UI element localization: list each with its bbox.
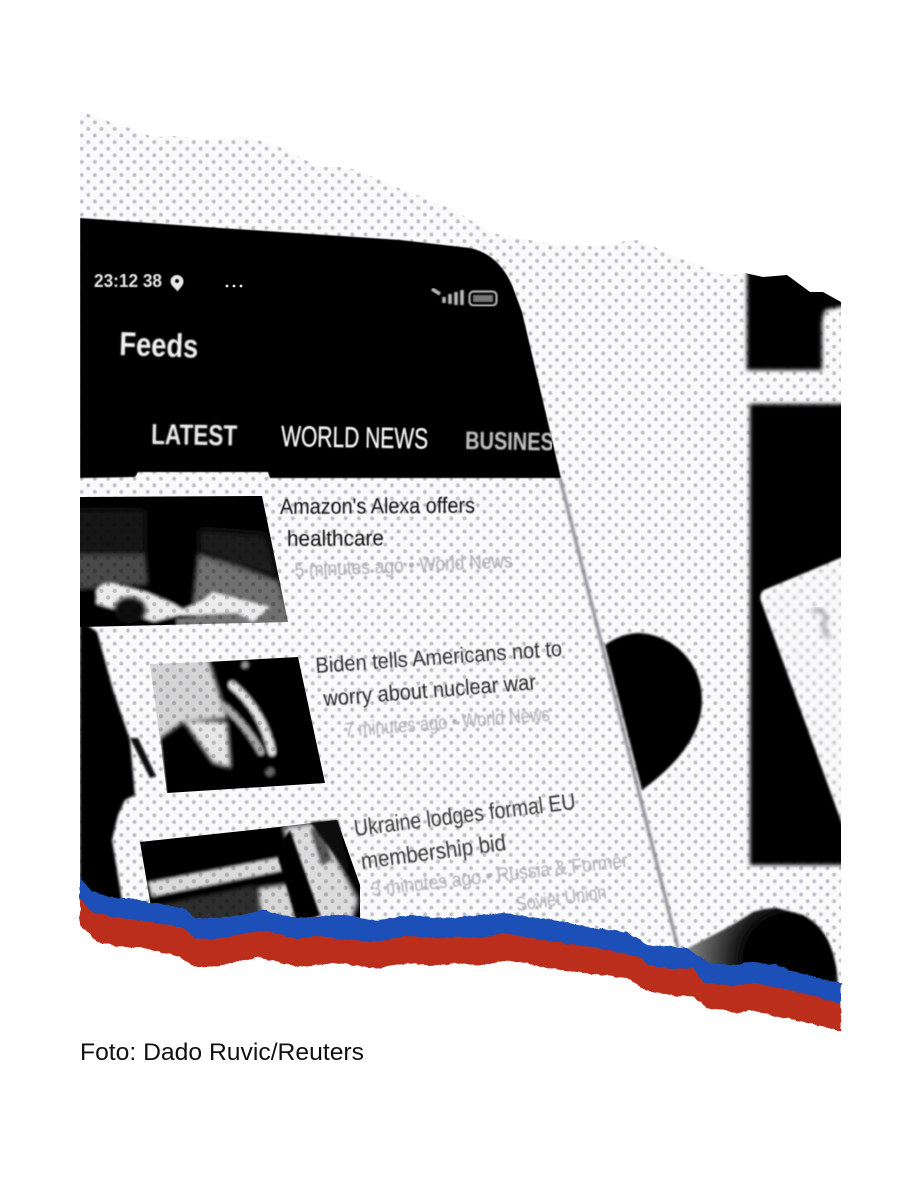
caption: Foto: Dado Ruvic/Reuters — [80, 1039, 364, 1066]
headline 2: Biden tells Americans not to — [315, 636, 563, 678]
icon: location pin — [170, 275, 184, 292]
white card in panel — [760, 556, 845, 832]
icon: signal and battery — [432, 289, 496, 306]
meta 3 — [371, 856, 628, 912]
headline 1: healthcare — [287, 525, 384, 551]
torn blue band — [80, 878, 841, 1004]
panel: torn halftone photo — [70, 100, 850, 1040]
thumbnail 1 — [80, 496, 288, 627]
black bump bottom right — [688, 908, 838, 990]
meta 3: 3 minutes ago • Russia & Former — [370, 850, 629, 901]
black panel right — [750, 404, 850, 865]
status dots — [226, 285, 242, 287]
halftone paper — [80, 100, 841, 1040]
thumbnail 3 — [140, 820, 360, 918]
meta 3: Soviet Union — [515, 882, 608, 916]
headline 2: worry about nuclear war — [322, 669, 537, 711]
tab: LATEST: LATEST — [151, 419, 238, 453]
headline 3 — [354, 792, 575, 870]
phone black header — [80, 218, 561, 478]
thumbnail 2 — [150, 657, 325, 793]
headline 2 — [316, 642, 562, 708]
thumbnail 2 side wedge — [130, 738, 156, 778]
black half circle — [605, 633, 702, 790]
phone status time: 23:12 38 — [94, 271, 162, 291]
phone edge shadow — [560, 478, 678, 948]
headline 1: Amazon's Alexa offers — [280, 493, 475, 519]
headline 1 — [280, 496, 476, 547]
smudge on card — [812, 610, 830, 638]
thumbnail 3 right wedge — [310, 820, 350, 875]
heading: Feeds: Feeds — [119, 325, 199, 365]
meta 2: 7 minutes ago • World News — [344, 704, 551, 742]
left dark column — [80, 620, 135, 900]
torn red band — [80, 896, 841, 1031]
tab: BUSINESS: BUSINESS — [465, 427, 567, 457]
headline 3: Ukraine lodges formal EU — [352, 788, 577, 841]
illustration with caption — [79, 111, 842, 1060]
black block top right — [747, 265, 845, 370]
thumbnail 3 centre stripe — [276, 830, 320, 925]
tab: WORLD NEWS: WORLD NEWS — [281, 421, 428, 456]
headline 3: membership bid — [359, 829, 507, 874]
meta 1: 5 minutes ago • World News — [294, 551, 513, 582]
